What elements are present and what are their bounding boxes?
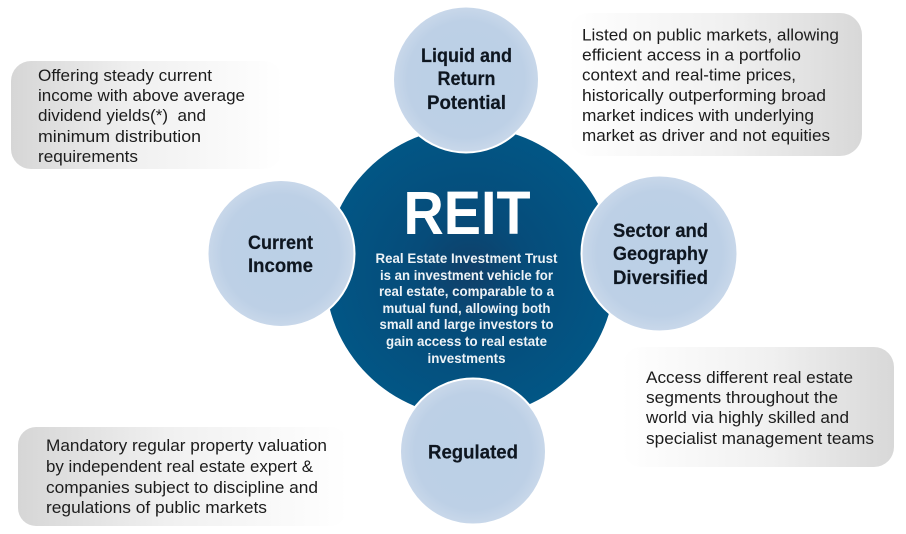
text: REIT definition: small and large investors to bbox=[380, 317, 554, 332]
circle: current income bbox=[208, 180, 354, 327]
panel: regulated description: regulations of public markets bbox=[46, 499, 267, 517]
text: REIT definition bbox=[376, 251, 558, 366]
panel: regulated description bbox=[18, 427, 348, 526]
text: REIT definition: Real Estate Investment Trust bbox=[376, 251, 558, 266]
panel: regulated description: by independent real estate expert & bbox=[46, 458, 313, 476]
panel: current income description bbox=[11, 61, 283, 169]
circle: current income: Current bbox=[248, 232, 313, 254]
panel: sector and geography description: Access different real estate bbox=[646, 369, 853, 387]
panel: regulated description: companies subject to discipline and bbox=[46, 479, 318, 497]
circle: liquid and return potential: Liquid and bbox=[421, 45, 512, 67]
circle: liquid and return potential: Potential bbox=[427, 92, 506, 114]
panel: liquid and return description bbox=[568, 13, 862, 156]
panel: sector and geography description: world via highly skilled and bbox=[645, 409, 849, 427]
circle: sector and geography diversified: Sector and bbox=[613, 220, 708, 242]
panel: sector and geography description: segments throughout the bbox=[646, 389, 838, 407]
panel: liquid and return description: historically outperforming broad bbox=[582, 87, 826, 105]
heading: REIT: REIT bbox=[404, 179, 530, 247]
panel: liquid and return description: Listed on public markets, allowing bbox=[582, 26, 839, 44]
panel: current income description: Offering steady current bbox=[38, 67, 212, 85]
text: REIT definition: mutual fund, allowing both bbox=[382, 301, 550, 316]
text: REIT definition: real estate, comparable to a bbox=[379, 284, 554, 299]
central circle: REIT bbox=[325, 127, 615, 417]
circle: sector and geography diversified: Diversified bbox=[613, 267, 708, 289]
circle: sector and geography diversified: Geography bbox=[613, 243, 708, 265]
text: REIT definition: investments bbox=[428, 351, 506, 366]
circle: current income: Income bbox=[248, 255, 313, 277]
circle: regulated: Regulated bbox=[428, 442, 518, 464]
panel: liquid and return description: context and real-time prices, bbox=[582, 66, 796, 84]
circle: sector and geography diversified bbox=[582, 176, 738, 332]
panel: liquid and return description: efficient access in a portfolio bbox=[582, 46, 801, 64]
circle: liquid and return potential bbox=[393, 6, 539, 152]
panel: current income description: dividend yields(*) and bbox=[38, 107, 206, 125]
panel: regulated description: Mandatory regular property valuation bbox=[46, 437, 327, 455]
text: REIT definition: is an investment vehicle for bbox=[380, 268, 554, 283]
panel: current income description: requirements bbox=[38, 148, 138, 166]
circle: liquid and return potential: Return bbox=[438, 68, 496, 90]
panel: sector and geography description bbox=[622, 347, 894, 467]
panel: liquid and return description: market as driver and not equities bbox=[582, 127, 830, 145]
panel: current income description: income with above average bbox=[38, 87, 245, 105]
circle: regulated bbox=[400, 378, 546, 524]
panel: liquid and return description: market indices with underlying bbox=[582, 107, 814, 125]
panel: sector and geography description: specialist management teams bbox=[646, 430, 874, 448]
panel: current income description: minimum distribution bbox=[38, 128, 201, 146]
text: REIT definition: gain access to real estate bbox=[386, 334, 547, 349]
